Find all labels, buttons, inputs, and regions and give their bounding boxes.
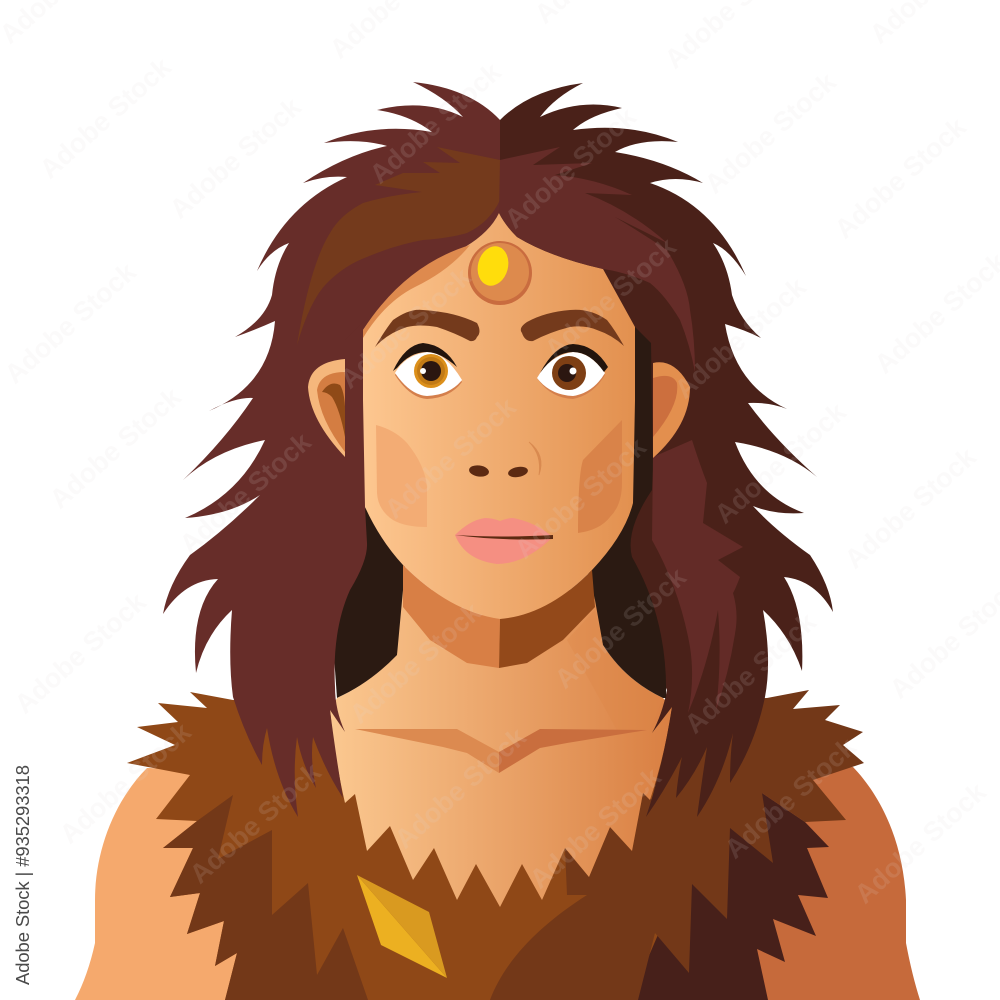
left eyebrow: [375, 310, 480, 347]
dark shadow behind neck right: [585, 327, 666, 698]
right eyebrow: [521, 310, 624, 346]
vest left half: [127, 692, 700, 1000]
collarbone: [355, 729, 647, 773]
left cheek paint: [376, 425, 427, 527]
watermark text: Adobe Stock: [849, 776, 992, 909]
front hair right sweep: [499, 147, 695, 372]
vest right half: [490, 690, 864, 1000]
hair right: [500, 83, 833, 817]
vest left shadow: [163, 795, 368, 1000]
watermark text: Adobe Stock: [379, 391, 522, 524]
watermark text: Adobe Stock: [184, 756, 327, 889]
watermark text: Adobe Stock: [9, 586, 152, 719]
watermark text: Adobe Stock: [549, 561, 692, 694]
face: [363, 213, 635, 619]
right eye: [537, 344, 608, 399]
watermark text: Adobe Stock: [699, 66, 842, 199]
neck and chest: [330, 590, 672, 907]
watermark text: Adobe Stock: [539, 231, 682, 364]
watermark text: Adobe Stock: [44, 381, 187, 514]
watermark text: Adobe Stock: [839, 441, 982, 574]
watermark text: Adobe Stock: [524, 761, 667, 894]
watermark text: Adobe Stock: [334, 261, 477, 394]
left ear: [308, 359, 345, 457]
vest right dark underside: [630, 793, 829, 1000]
left eye: [393, 343, 462, 399]
nose: [468, 442, 541, 479]
right cheek paint: [578, 420, 622, 533]
watermark text: Adobe Stock: [669, 271, 812, 404]
watermark text: Adobe Stock: [829, 111, 972, 244]
left arm: [75, 768, 240, 1000]
watermark text: Adobe Stock: [499, 101, 642, 234]
fur vest: [127, 690, 864, 1000]
watermark text: Adobe Stock: [54, 716, 197, 849]
watermark text: Adobe Stock: [174, 426, 317, 559]
front hair brown sweep left: [297, 147, 500, 345]
watermark text: Adobe Stock: [389, 721, 532, 854]
chin shadow: [403, 565, 595, 668]
lips: [455, 518, 553, 564]
watermark text: Adobe Stock: [34, 51, 177, 184]
right arm: [755, 767, 920, 1000]
watermark text: Adobe Stock: [364, 56, 507, 189]
gem pendant: [357, 875, 447, 978]
watermark text: Adobe Stock: [679, 606, 822, 739]
watermark text: Adobe Stock: [0, 256, 142, 389]
hair left: [163, 82, 500, 817]
watermark text: Adobe Stock: [719, 731, 862, 864]
image id credit: Adobe Stock | #935293318: [12, 765, 33, 985]
forehead jewel: [468, 241, 532, 305]
neck side shade: [567, 610, 663, 730]
watermark text: Adobe Stock: [164, 91, 307, 224]
forehead shade: [363, 245, 470, 338]
right ear: [653, 362, 690, 458]
watermark text: Adobe Stock: [709, 396, 852, 529]
dark shadow behind neck left: [330, 507, 405, 698]
watermark text: Adobe Stock: [509, 431, 652, 564]
lighter hair lock right: [652, 440, 743, 713]
watermark text: Adobe Stock: [344, 596, 487, 729]
hair strip left of face: [345, 320, 365, 520]
